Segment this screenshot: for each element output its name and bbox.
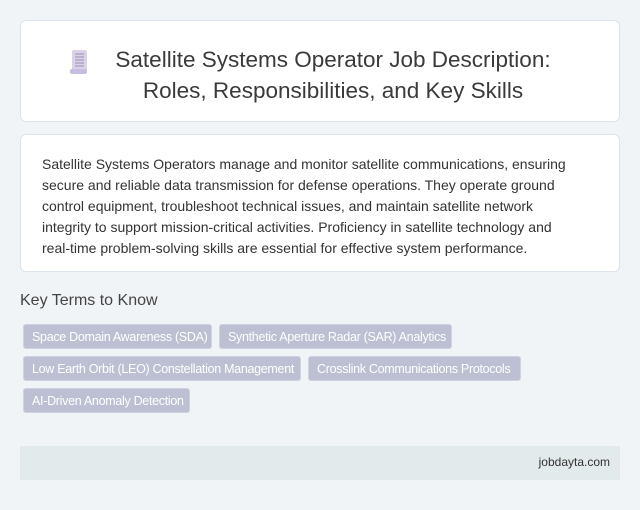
- tag 2: Synthetic Aperture Radar (SAR) Analytics: [228, 330, 446, 344]
- tag 5: AI-Driven Anomaly Detection: [32, 394, 184, 408]
- title: Satellite Systems Operator Job Description: Roles, Responsibilities, and Key Skills: [115, 47, 551, 103]
- tag 4: Crosslink Communications Protocols: [317, 362, 510, 376]
- tag 5: [23, 388, 190, 413]
- description text: Satellite Systems Operators manage and monitor satellite communications, ensuring secure and reliable data transmission for defense operations. They operate ground control equipment, troubleshoot technical issues, and maintain satellite network integrity to support mission-critical activities. Proficiency in satellite technology and real-time problem-solving skills are essential for effective system performance.: [42, 156, 566, 256]
- tag 2: [219, 324, 452, 349]
- footer text: jobdayta.com: [539, 455, 610, 469]
- heading: key terms: Key Terms to Know: [20, 292, 158, 309]
- header card: [20, 20, 620, 122]
- icon: document: [70, 50, 87, 74]
- tag 4: [308, 356, 521, 381]
- footer: [20, 446, 620, 480]
- tag 1: Space Domain Awareness (SDA): [32, 330, 207, 344]
- tag 1: [23, 324, 212, 349]
- description card: [20, 134, 620, 272]
- tag 3: Low Earth Orbit (LEO) Constellation Management: [32, 362, 294, 376]
- tag 3: [23, 356, 301, 381]
